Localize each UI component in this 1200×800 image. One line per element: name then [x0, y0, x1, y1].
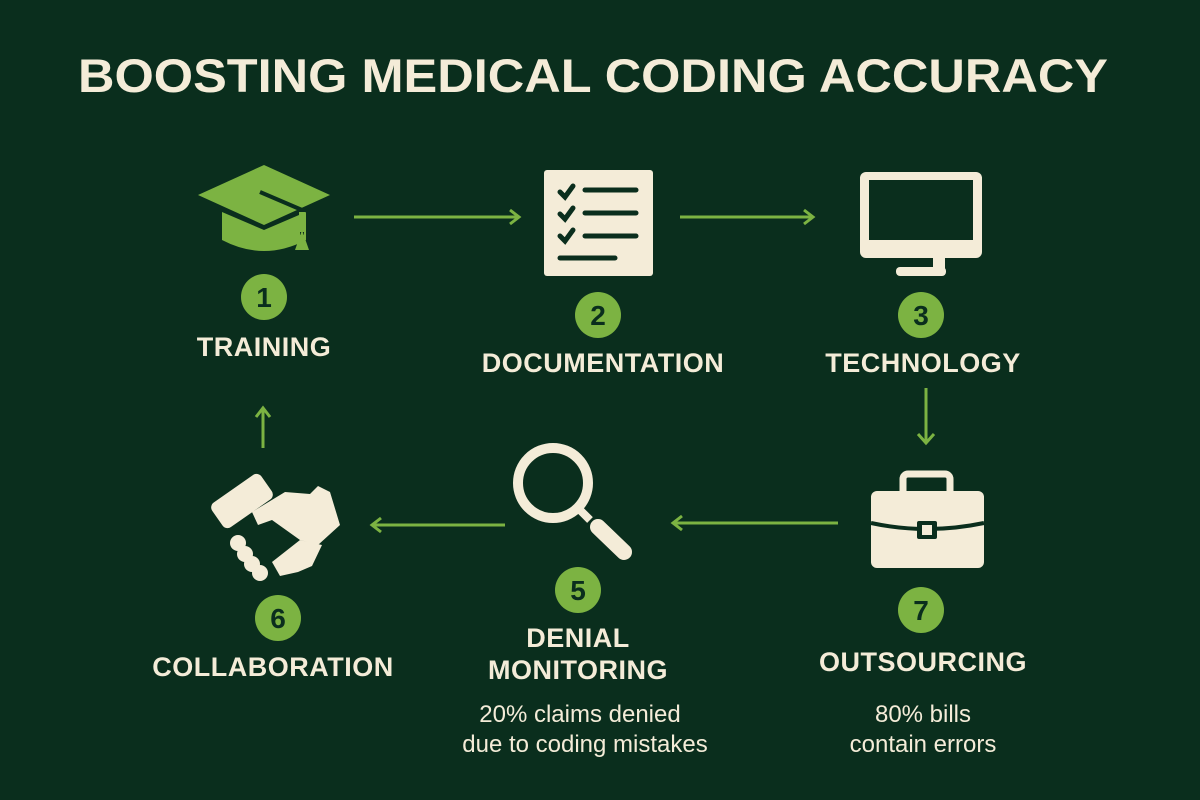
label: collaboration: COLLABORATION [152, 652, 394, 682]
arrow 5 to 6 [372, 518, 505, 532]
step 6 badge [255, 595, 301, 641]
icon: graduation cap [198, 165, 330, 251]
step 6 badge: 6 [270, 603, 286, 634]
step 7 badge [898, 587, 944, 633]
step 2 badge: 2 [590, 300, 606, 331]
step 3 badge: 3 [913, 300, 929, 331]
icon: checklist document [544, 170, 653, 276]
stat: denial: 20% claims denied [479, 701, 681, 728]
label: documentation: DOCUMENTATION [482, 348, 724, 378]
step 5 badge: 5 [570, 575, 586, 606]
arrow 7 to 5 [673, 516, 838, 530]
step 5 badge [555, 567, 601, 613]
label: technology: TECHNOLOGY [825, 348, 1021, 378]
icon: briefcase [871, 474, 984, 568]
icon: handshake [209, 472, 340, 581]
label: denial monitoring: MONITORING [488, 655, 668, 685]
label: outsourcing: OUTSOURCING [819, 647, 1027, 677]
icon: magnifier [518, 448, 624, 552]
arrow 1 to 2 [354, 210, 519, 224]
step 2 badge [575, 292, 621, 338]
stat: denial: due to coding mistakes [462, 731, 708, 758]
label: training: TRAINING [197, 332, 331, 362]
icon: monitor [860, 172, 982, 276]
title: BOOSTING MEDICAL CODING ACCURACY [78, 49, 1108, 102]
stat: outsourcing: 80% bills [875, 701, 971, 728]
step 1 badge: 1 [256, 282, 272, 313]
stat: outsourcing: contain errors [850, 731, 996, 758]
arrow 3 to 7 [918, 388, 934, 443]
step 1 badge [241, 274, 287, 320]
step 3 badge [898, 292, 944, 338]
label: denial monitoring: DENIAL [526, 623, 630, 653]
step 7 badge: 7 [913, 595, 929, 626]
arrow 6 to 1 [256, 408, 270, 448]
arrow 2 to 3 [680, 210, 813, 224]
